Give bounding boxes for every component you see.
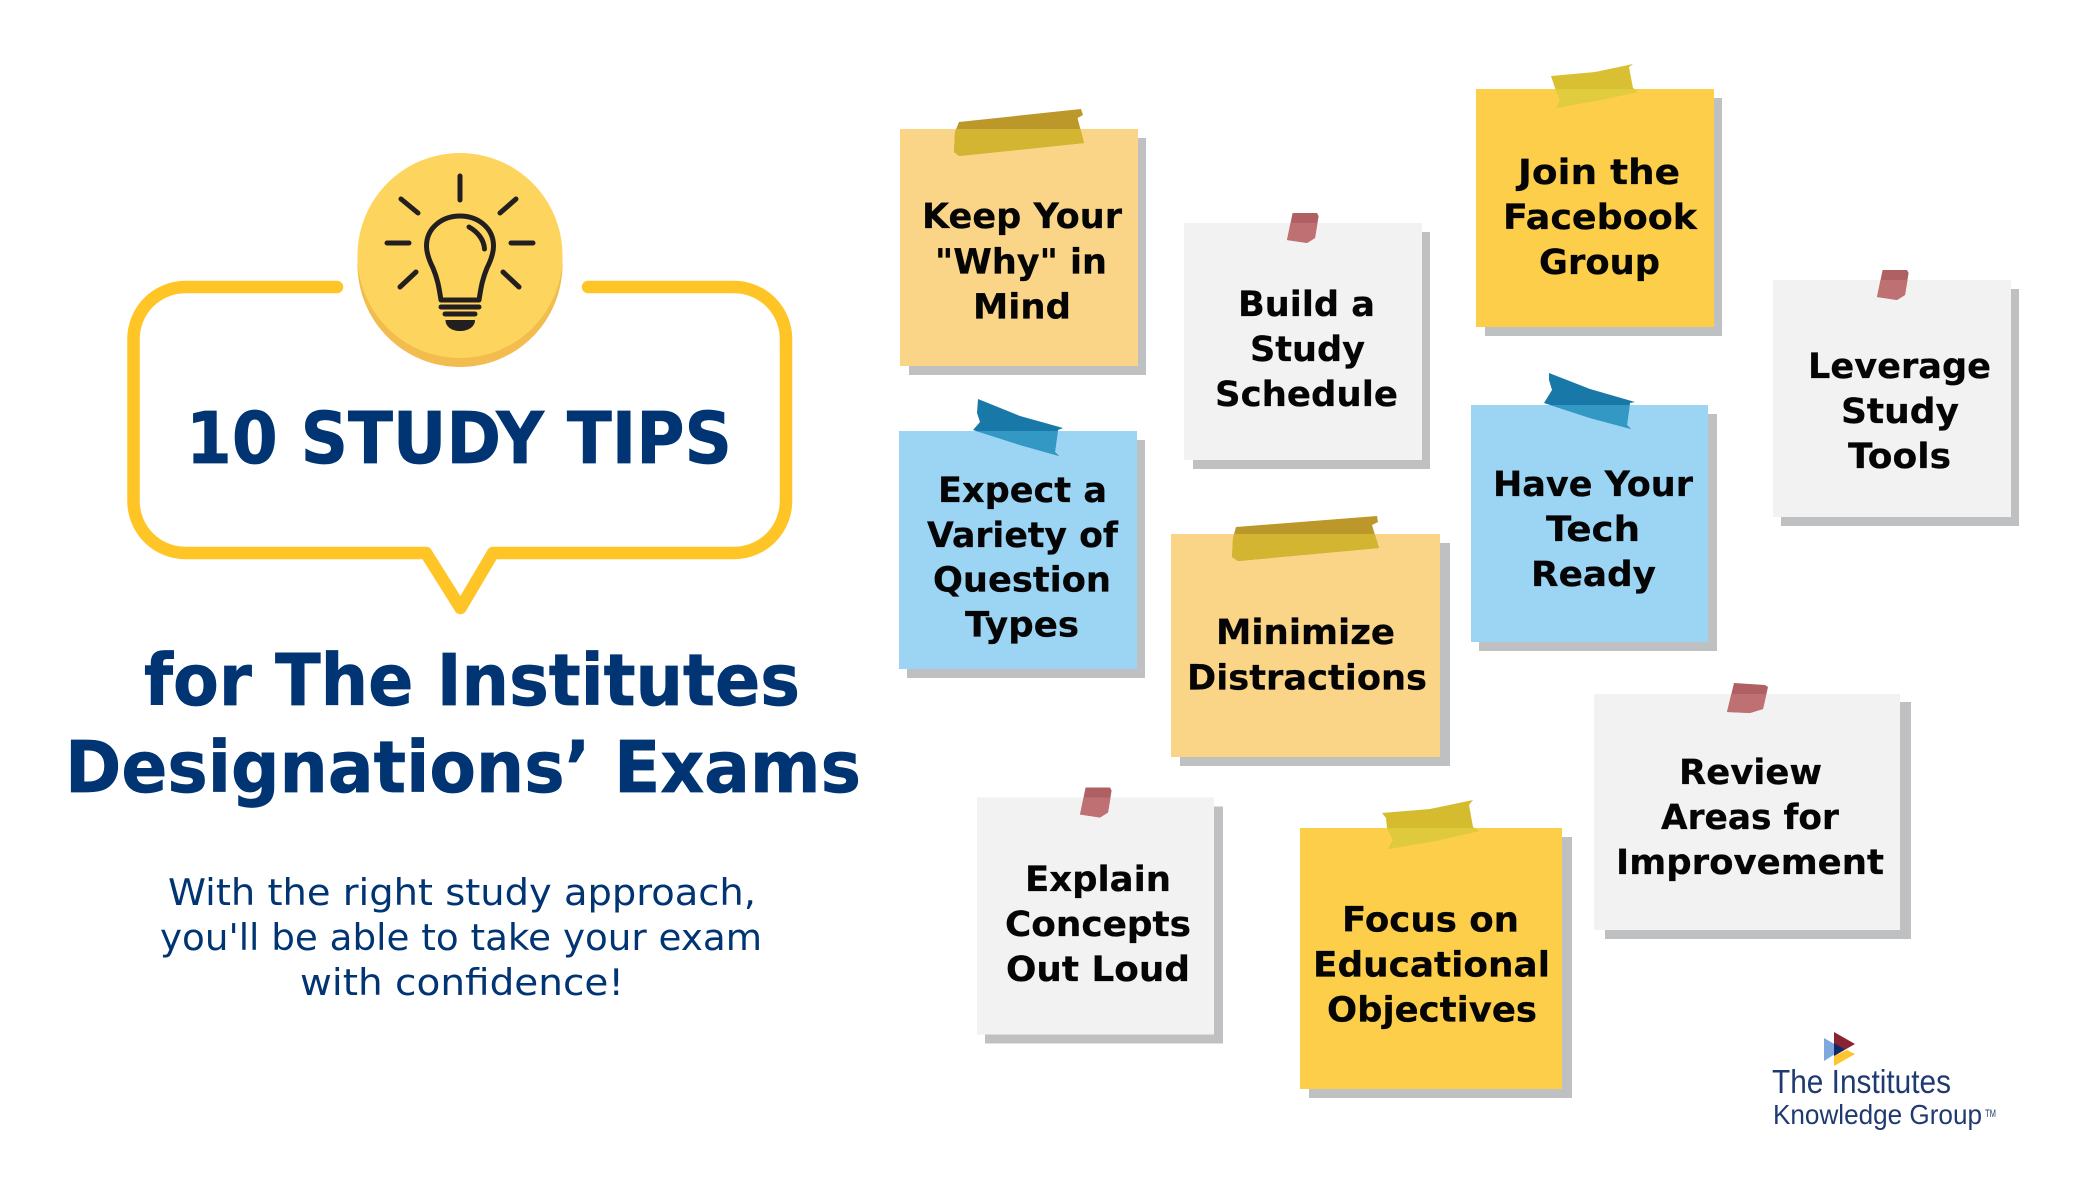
pin: red tape	[1080, 788, 1112, 818]
tape: blue	[973, 399, 1063, 456]
note: leverage study tools: Leverage	[1808, 347, 1991, 387]
note: have your tech ready: Tech	[1546, 510, 1640, 550]
note: join the facebook group: Join the	[1516, 153, 1680, 193]
intro text block	[160, 871, 762, 1004]
intro text block: With the right study approach,	[168, 871, 756, 914]
note: leverage study tools: Tools	[1848, 437, 1951, 477]
note: build a study schedule: Study	[1250, 330, 1365, 370]
pin: red tape	[1727, 683, 1768, 713]
note: build a study schedule	[1184, 213, 1430, 469]
logo: the institutes knowledge group: The Institutes	[1772, 1063, 1951, 1100]
note: expect a variety of question types	[899, 399, 1145, 678]
note: build a study schedule: Build a	[1238, 285, 1375, 325]
note: keep your why in mind: Mind	[973, 288, 1071, 328]
heading: 10 study tips: 10 STUDY TIPS	[186, 397, 732, 480]
note: review areas for improvement: Review	[1679, 753, 1822, 793]
note: minimize distractions: Distractions	[1187, 658, 1427, 698]
note: review areas for improvement	[1594, 683, 1911, 939]
tape: gold	[954, 109, 1084, 156]
note: explain concepts out loud: Explain	[1025, 860, 1171, 900]
note: explain concepts out loud: Out Loud	[1006, 950, 1190, 990]
note: minimize distractions	[1171, 516, 1450, 766]
note: focus on educational objectives	[1300, 800, 1572, 1098]
subtitle heading: Designations’ Exams	[65, 726, 861, 809]
note: leverage study tools	[1773, 270, 2019, 526]
note: expect a variety of question types: Variety of	[927, 516, 1119, 556]
note: focus on educational objectives: Focus on	[1342, 900, 1519, 940]
note: leverage study tools: Study	[1841, 392, 1959, 432]
note: have your tech ready: Have Your	[1493, 465, 1694, 505]
speech bubble with title	[134, 287, 786, 608]
note: focus on educational objectives: Educational	[1313, 946, 1550, 986]
note: join the facebook group: Group	[1539, 243, 1660, 283]
note: explain concepts out loud	[977, 788, 1223, 1044]
speech bubble outline	[134, 287, 786, 608]
note: expect a variety of question types: Expect a	[938, 471, 1107, 511]
note: focus on educational objectives: Objectives	[1327, 990, 1537, 1030]
note: minimize distractions: Minimize	[1216, 613, 1395, 653]
note: keep your why in mind	[900, 109, 1146, 375]
subtitle heading	[65, 639, 861, 809]
pin: red tape	[1877, 270, 1909, 300]
note: review areas for improvement: Improvement	[1616, 843, 1884, 883]
note: expect a variety of question types: Question	[933, 560, 1111, 600]
tape: yellow	[1382, 800, 1479, 849]
logo: the institutes knowledge group: Knowledge Group	[1773, 1099, 1982, 1130]
tape: gold	[1232, 516, 1379, 561]
note: join the facebook group: Facebook	[1503, 198, 1698, 238]
tape: yellow	[1551, 64, 1638, 108]
note: keep your why in mind: "Why" in	[935, 242, 1107, 282]
note: have your tech ready: Ready	[1531, 555, 1656, 595]
subtitle heading: for The Institutes	[144, 639, 800, 722]
note: explain concepts out loud: Concepts	[1005, 905, 1191, 945]
tape: blue	[1544, 373, 1635, 429]
intro text block: with confidence!	[300, 961, 624, 1004]
icon: light bulb badge	[358, 153, 562, 367]
note: join the facebook group	[1476, 64, 1722, 336]
note: have your tech ready	[1471, 373, 1717, 651]
note: build a study schedule: Schedule	[1215, 375, 1398, 415]
note: review areas for improvement: Areas for	[1661, 798, 1840, 838]
logo: the institutes knowledge group	[1772, 1032, 1996, 1130]
note: keep your why in mind: Keep Your	[922, 197, 1123, 237]
pin: red tape	[1287, 213, 1319, 243]
logo: the institutes knowledge group: TM	[1985, 1108, 1996, 1120]
note: expect a variety of question types: Types	[965, 606, 1079, 646]
intro text block: you'll be able to take your exam	[160, 916, 762, 959]
